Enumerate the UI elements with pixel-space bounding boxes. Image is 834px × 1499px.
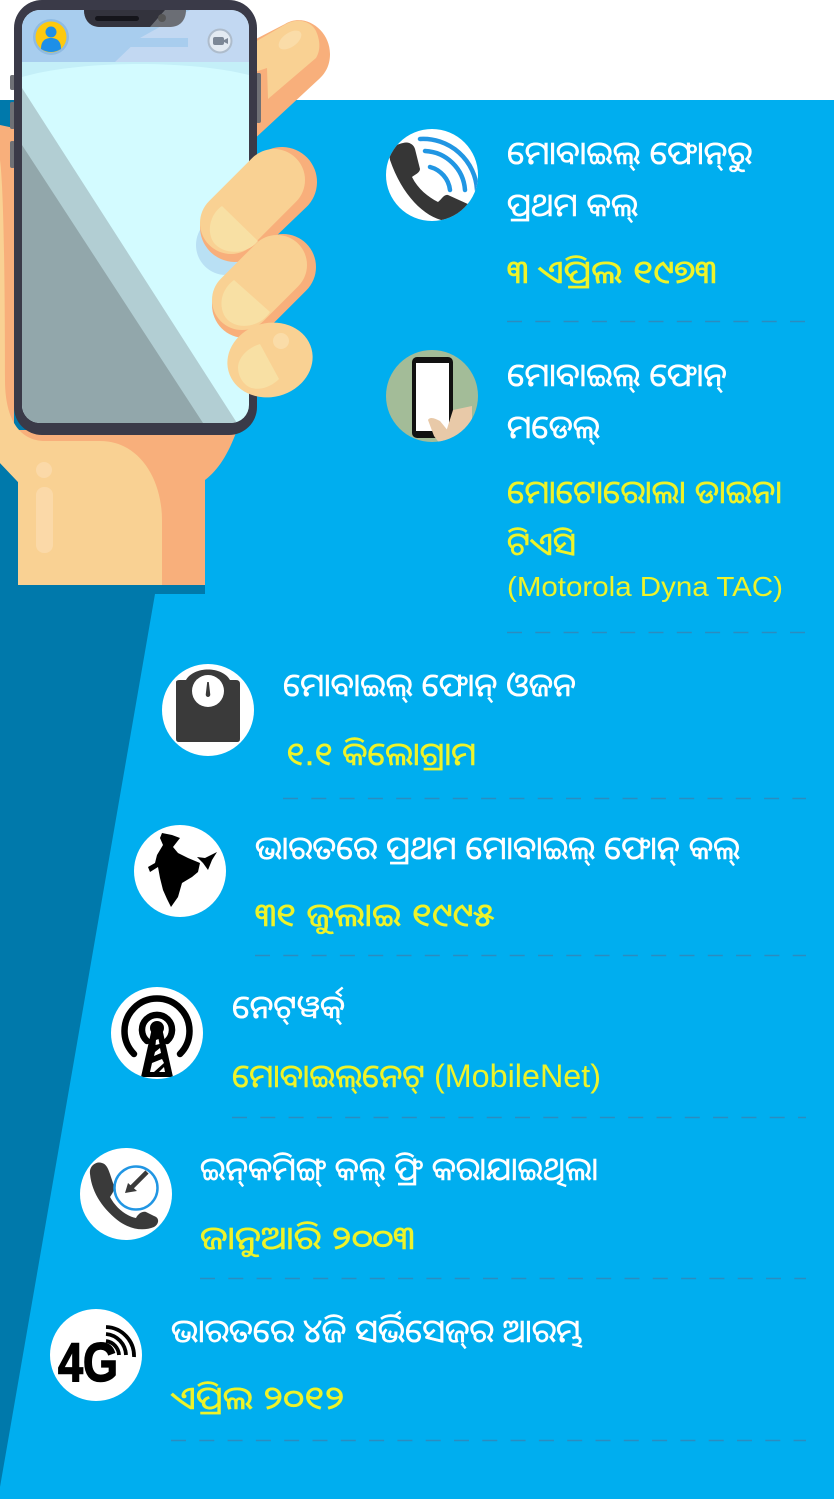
row 3: phone weight — [162, 664, 576, 772]
finger 1 — [210, 180, 282, 252]
palm and wrist — [0, 125, 237, 585]
text: heading line 2: ପ୍ରଥମ କଲ୍ — [507, 187, 638, 223]
dark wedge — [0, 100, 205, 1487]
text: value: ମୋଟୋରୋଲା ଡାଇନା — [507, 474, 782, 510]
avatar icon — [33, 19, 69, 55]
text: value: ୧.୧ କିଲୋଗ୍ରାମ — [286, 736, 476, 772]
row 5: network — [111, 986, 601, 1094]
row 7: 4G launch — [50, 1309, 583, 1416]
icon: weighing scale — [162, 664, 254, 756]
text: heading: ମୋବାଇଲ୍ ଫୋନ୍‌ରୁ — [507, 135, 752, 172]
row 6: free incoming calls — [80, 1148, 598, 1257]
text: value: ୩ ଏପ୍ରିଲ ୧୯୭୩ — [507, 254, 716, 290]
text: heading: ଇନ୍‌କମିଙ୍ଗ୍ କଲ୍ ଫ୍ରି କରାଯାଇଥିଲା — [200, 1151, 598, 1187]
illustration: hand holding phone — [0, 0, 330, 585]
text: value: ୩୧ ଜୁଲାଇ ୧୯୯୫ — [255, 897, 495, 934]
icon: signal tower — [111, 987, 203, 1079]
finger shadow — [196, 215, 256, 275]
icon: 4G signal: 4G — [58, 1331, 118, 1393]
icon: phone in hand — [386, 350, 478, 446]
icon: map of India — [134, 825, 226, 917]
index finger behind phone — [250, 20, 330, 143]
icon: handset with signal — [386, 129, 478, 221]
phone screen — [22, 10, 249, 423]
text: value line 2: ଟିଏସି — [507, 526, 576, 562]
text: heading: ନେଟ୍‌ୱର୍କ୍ — [232, 986, 345, 1025]
icon: 4G signal — [50, 1309, 142, 1401]
finger 2 — [221, 265, 283, 326]
phone notch — [84, 10, 186, 27]
phone body — [14, 0, 257, 435]
finger 3 — [219, 313, 321, 407]
text: value: ମୋବାଇଲ୍‌ନେଟ୍ (MobileNet) — [232, 1058, 601, 1094]
video icon — [208, 30, 232, 52]
text: heading: ଭାରତରେ ପ୍ରଥମ ମୋବାଇଲ୍ ଫୋନ୍ କଲ୍ — [255, 830, 740, 866]
row 4: first call in India — [134, 825, 740, 934]
text: heading: ଭାରତରେ ୪ଜି ସର୍ଭିସେଜ୍‌ର ଆରମ୍ଭ — [171, 1310, 583, 1349]
text: heading: ମୋବାଇଲ୍ ଫୋନ୍ — [507, 357, 727, 393]
row 2: phone model — [386, 350, 783, 602]
text: heading: ମୋବାଇଲ୍ ଫୋନ୍ ଓଜନ — [283, 667, 576, 703]
row 1: first mobile call — [386, 129, 752, 290]
text: value: ଏପ୍ରିଲ ୨୦୧୨ — [170, 1380, 345, 1416]
icon: incoming call — [80, 1148, 172, 1240]
phone side buttons — [10, 73, 261, 168]
text: latin name: (Motorola Dyna TAC) — [507, 571, 783, 602]
text: heading line 2: ମଡେଲ୍ — [507, 409, 600, 445]
text: value: ଜାନୁଆରି ୨୦୦୩ — [200, 1220, 414, 1257]
